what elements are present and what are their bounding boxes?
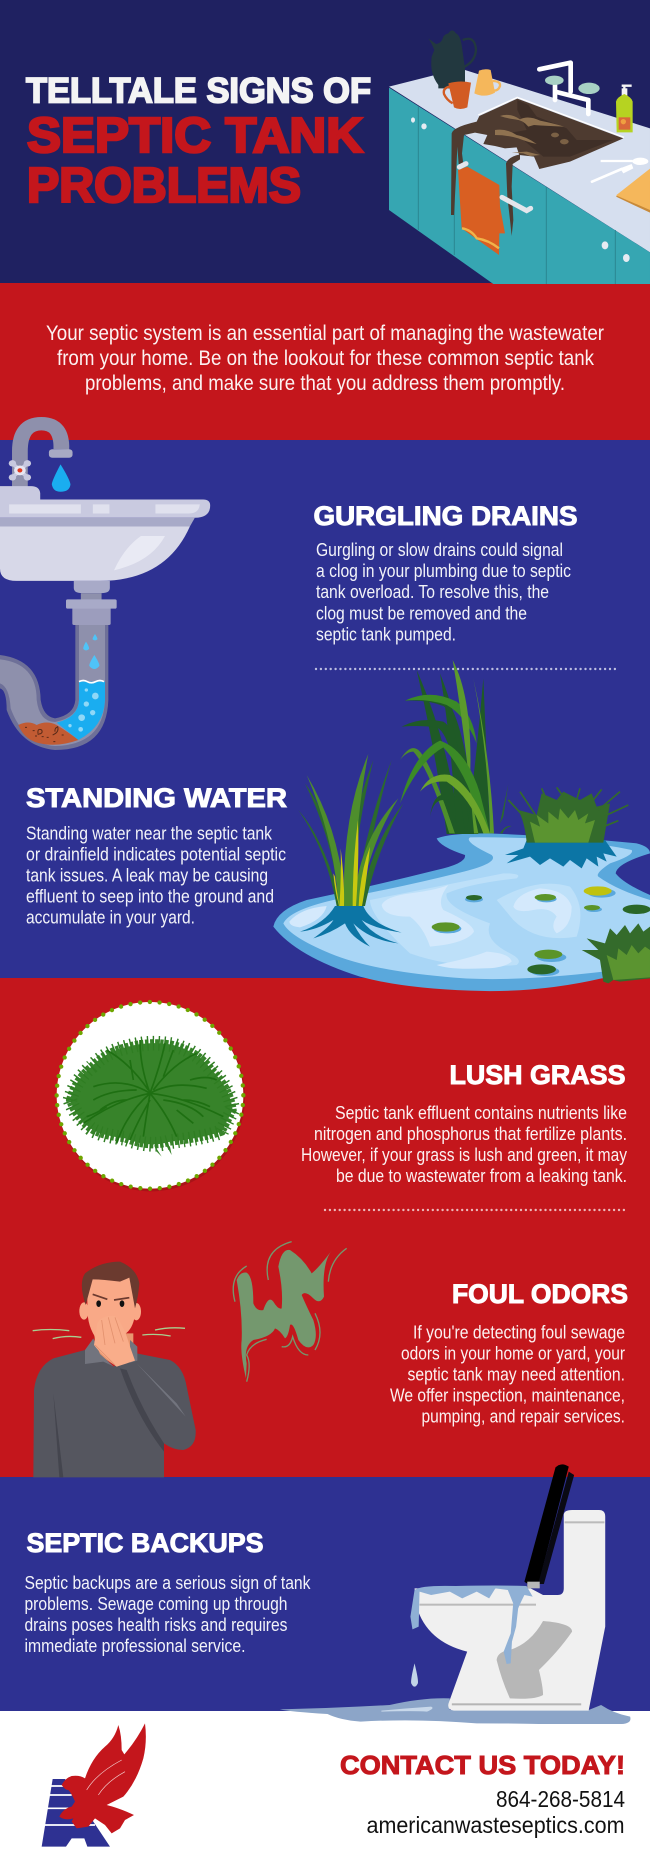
intro text: problems, and make sure that you address them promptly. [85, 372, 565, 395]
standing water body text [26, 822, 286, 928]
title [26, 72, 371, 213]
illustration: pond with plants [273, 660, 650, 991]
standing water body text: accumulate in your yard. [26, 906, 195, 928]
illustration: overflowing toilet [280, 1464, 630, 1724]
standing water heading: STANDING WATER [26, 783, 287, 813]
intro text [46, 322, 604, 395]
panel: intro background [0, 283, 650, 440]
gurgling drains body text: clog must be removed and the [316, 602, 527, 624]
lush grass heading: LUSH GRASS [450, 1060, 626, 1090]
gurgling drains body text: tank overload. To resolve this, the [316, 581, 549, 602]
gurgling drains body text [316, 539, 571, 644]
title: PROBLEMS [27, 159, 301, 213]
illustration: man covering his nose [33, 1242, 347, 1477]
gurgling drains body text: a clog in your plumbing due to septic [316, 560, 571, 581]
logo: red eagle over blue A [42, 1723, 146, 1847]
septic backups body text: problems. Sewage coming up through [24, 1593, 288, 1614]
gurgling drains heading: GURGLING DRAINS [314, 501, 578, 531]
septic backups body text [24, 1572, 311, 1656]
foul odors heading: FOUL ODORS [452, 1279, 628, 1309]
illustration: lush grass badge [57, 1002, 245, 1191]
gurgling drains body text: Gurgling or slow drains could signal [316, 539, 563, 560]
illustration: overflowing kitchen sink [389, 30, 650, 284]
septic backups body text: drains poses health risks and requires [24, 1614, 288, 1635]
standing water body text: tank issues. A leak may be causing [26, 864, 268, 886]
panel: lush grass and foul odors background [0, 978, 650, 1477]
lush grass body text [301, 1102, 628, 1186]
gurgling drains body text: septic tank pumped. [316, 624, 456, 644]
title: SEPTIC TANK [27, 109, 363, 163]
website: americanwasteseptics.com [366, 1812, 624, 1838]
standing water body text: effluent to seep into the ground and [26, 886, 274, 906]
panel: gurgling drains and standing water background [0, 440, 650, 978]
illustration: sink with clogged drain pipe [0, 424, 210, 750]
standing water body text: or drainfield indicates potential septic [26, 844, 286, 864]
septic backups body text: immediate professional service. [24, 1635, 246, 1656]
septic backups body text: Septic backups are a serious sign of tank [24, 1572, 311, 1593]
panel: header background [0, 0, 650, 283]
standing water body text: Standing water near the septic tank [26, 822, 273, 844]
phone number: 864-268-5814 [496, 1786, 625, 1812]
septic backups heading: SEPTIC BACKUPS [26, 1528, 264, 1558]
panel: contact footer background [0, 1711, 650, 1861]
intro text: from your home. Be on the lookout for these common septic tank [57, 347, 594, 370]
foul odors body text [390, 1321, 625, 1426]
contact heading: CONTACT US TODAY! [340, 1750, 625, 1780]
panel: septic backups background [0, 1477, 650, 1711]
title: TELLTALE SIGNS OF [26, 72, 371, 110]
